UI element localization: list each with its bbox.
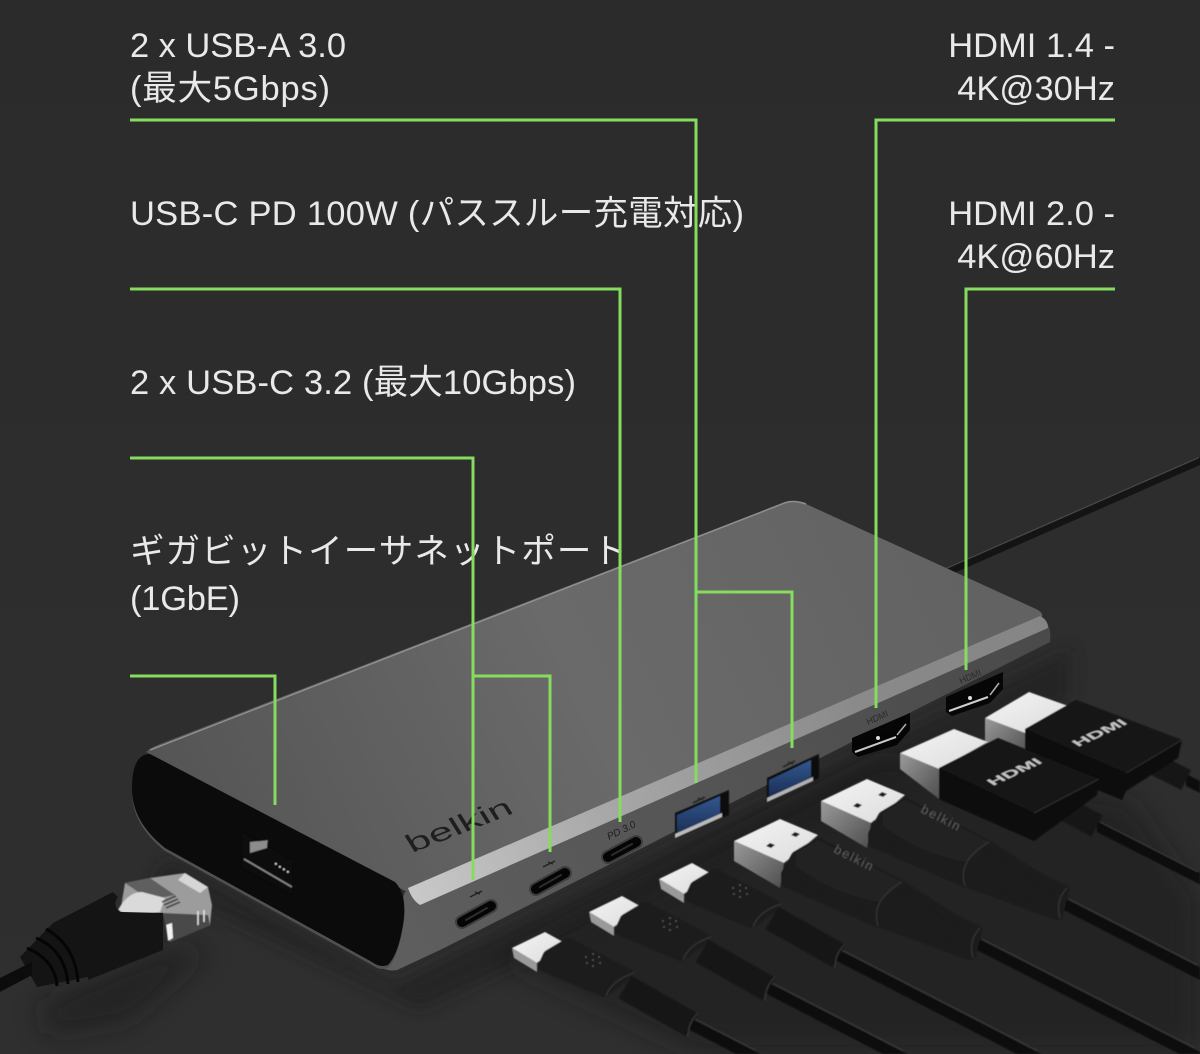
hdmi logo: HDMI [984, 757, 1046, 788]
cable [1186, 774, 1200, 793]
port: usb-c pd 3.0: PD 3.0 [605, 819, 638, 843]
port: usb-c 2 [536, 861, 565, 889]
black body [939, 738, 1099, 841]
port: usb-c pd 3.0 [605, 819, 638, 857]
metal shell [900, 729, 988, 769]
rj45 clear connector [118, 873, 212, 942]
callout text: gigabit ethernet: ギガビットイーサネットポート [130, 533, 627, 571]
dock top edge highlight [150, 502, 806, 750]
callout text: hdmi 1.4: HDMI 1.4 - [948, 27, 1115, 65]
port: hdmi 2: HDMI [958, 667, 983, 686]
metal shell [589, 896, 640, 927]
belkin label: belkin [919, 801, 963, 834]
dock top surface [146, 501, 1042, 892]
callout text: hdmi 2.0: 4K@60Hz [957, 238, 1115, 276]
line: usb-c 3.2 [130, 458, 550, 880]
hdmi plug front [900, 729, 1200, 884]
dock left end rim [132, 758, 404, 969]
ethernet cable [0, 873, 212, 1035]
cable [837, 949, 1041, 1054]
metal shell [821, 779, 905, 823]
callout text: usb-a 3.0 [130, 27, 346, 108]
rj45 boot [53, 892, 163, 980]
usb-a plug rear [821, 779, 1200, 980]
ethernet port [242, 832, 292, 895]
port: hdmi 1 [852, 708, 910, 757]
usb-c plug 2 [589, 896, 907, 1054]
overmold [543, 943, 628, 992]
cable [1062, 897, 1200, 980]
cable [1097, 820, 1200, 884]
dock left end [132, 754, 404, 966]
port: usb-c 1 [462, 891, 491, 922]
strain relief [1130, 752, 1186, 780]
port: usb-a 1 [675, 790, 729, 839]
callout text: usb-a 3.0: (最大5Gbps) [130, 70, 330, 108]
belkin label: belkin [832, 841, 876, 874]
line: usb-c pd [130, 289, 620, 822]
usb-a plug front [734, 819, 1200, 1054]
hdmi logo: HDMI [1069, 718, 1131, 749]
logo dots [732, 884, 748, 898]
dock bevel highlight [408, 616, 1048, 905]
rj45 cable [0, 962, 32, 992]
strain relief [1060, 806, 1097, 826]
ethernet shadow [40, 950, 210, 1035]
usb-c plug 3 [512, 932, 760, 1054]
callout text: gigabit ethernet: (1GbE) [130, 580, 240, 618]
overmold [786, 843, 977, 955]
metal shell [985, 692, 1071, 733]
metal shell [659, 863, 710, 894]
dock front face [378, 616, 1050, 970]
overmold [620, 907, 705, 956]
callout text: usb-c 3.2: 2 x USB-C 3.2 (最大10Gbps) [130, 364, 576, 402]
callout text: hdmi 2.0 [948, 195, 1115, 276]
overmold [873, 803, 1064, 915]
line: ethernet [130, 676, 275, 805]
overmold [690, 874, 775, 923]
callout text: hdmi 2.0: HDMI 2.0 - [948, 195, 1115, 233]
callout text: hdmi 1.4: 4K@30Hz [957, 70, 1115, 108]
cable [690, 1018, 760, 1054]
cables shadow [500, 760, 1200, 1054]
belkin logo: belkin [400, 793, 518, 858]
metal shell [512, 932, 563, 963]
port: usb-a 2 [767, 754, 819, 803]
dock shadow [150, 650, 1070, 1010]
line: hdmi 1.4 [876, 120, 1115, 708]
rj45 strain relief [20, 923, 88, 987]
port: hdmi 2 [946, 667, 1003, 716]
logo dots [585, 953, 601, 967]
metal shell [734, 819, 818, 863]
cable [975, 937, 1200, 1054]
back power cable [945, 457, 1200, 577]
callout text: usb-c pd 100w: USB-C PD 100W (パススルー充電対応) [130, 195, 744, 233]
callout text: gigabit ethernet [130, 533, 627, 618]
line: hdmi 2.0 [966, 289, 1115, 670]
callout text: hdmi 1.4 [948, 27, 1115, 108]
usb-c plug 1 [659, 863, 1041, 1054]
port: hdmi 1: HDMI [865, 708, 890, 727]
dock product [132, 501, 1070, 1010]
hdmi plug rear [985, 692, 1200, 800]
logo dots [662, 917, 678, 931]
cable [767, 982, 907, 1054]
black body [1025, 700, 1182, 800]
leader lines [130, 120, 1115, 880]
line: usb-a [130, 120, 792, 783]
callout text: usb-a 3.0: 2 x USB-A 3.0 [130, 27, 346, 65]
